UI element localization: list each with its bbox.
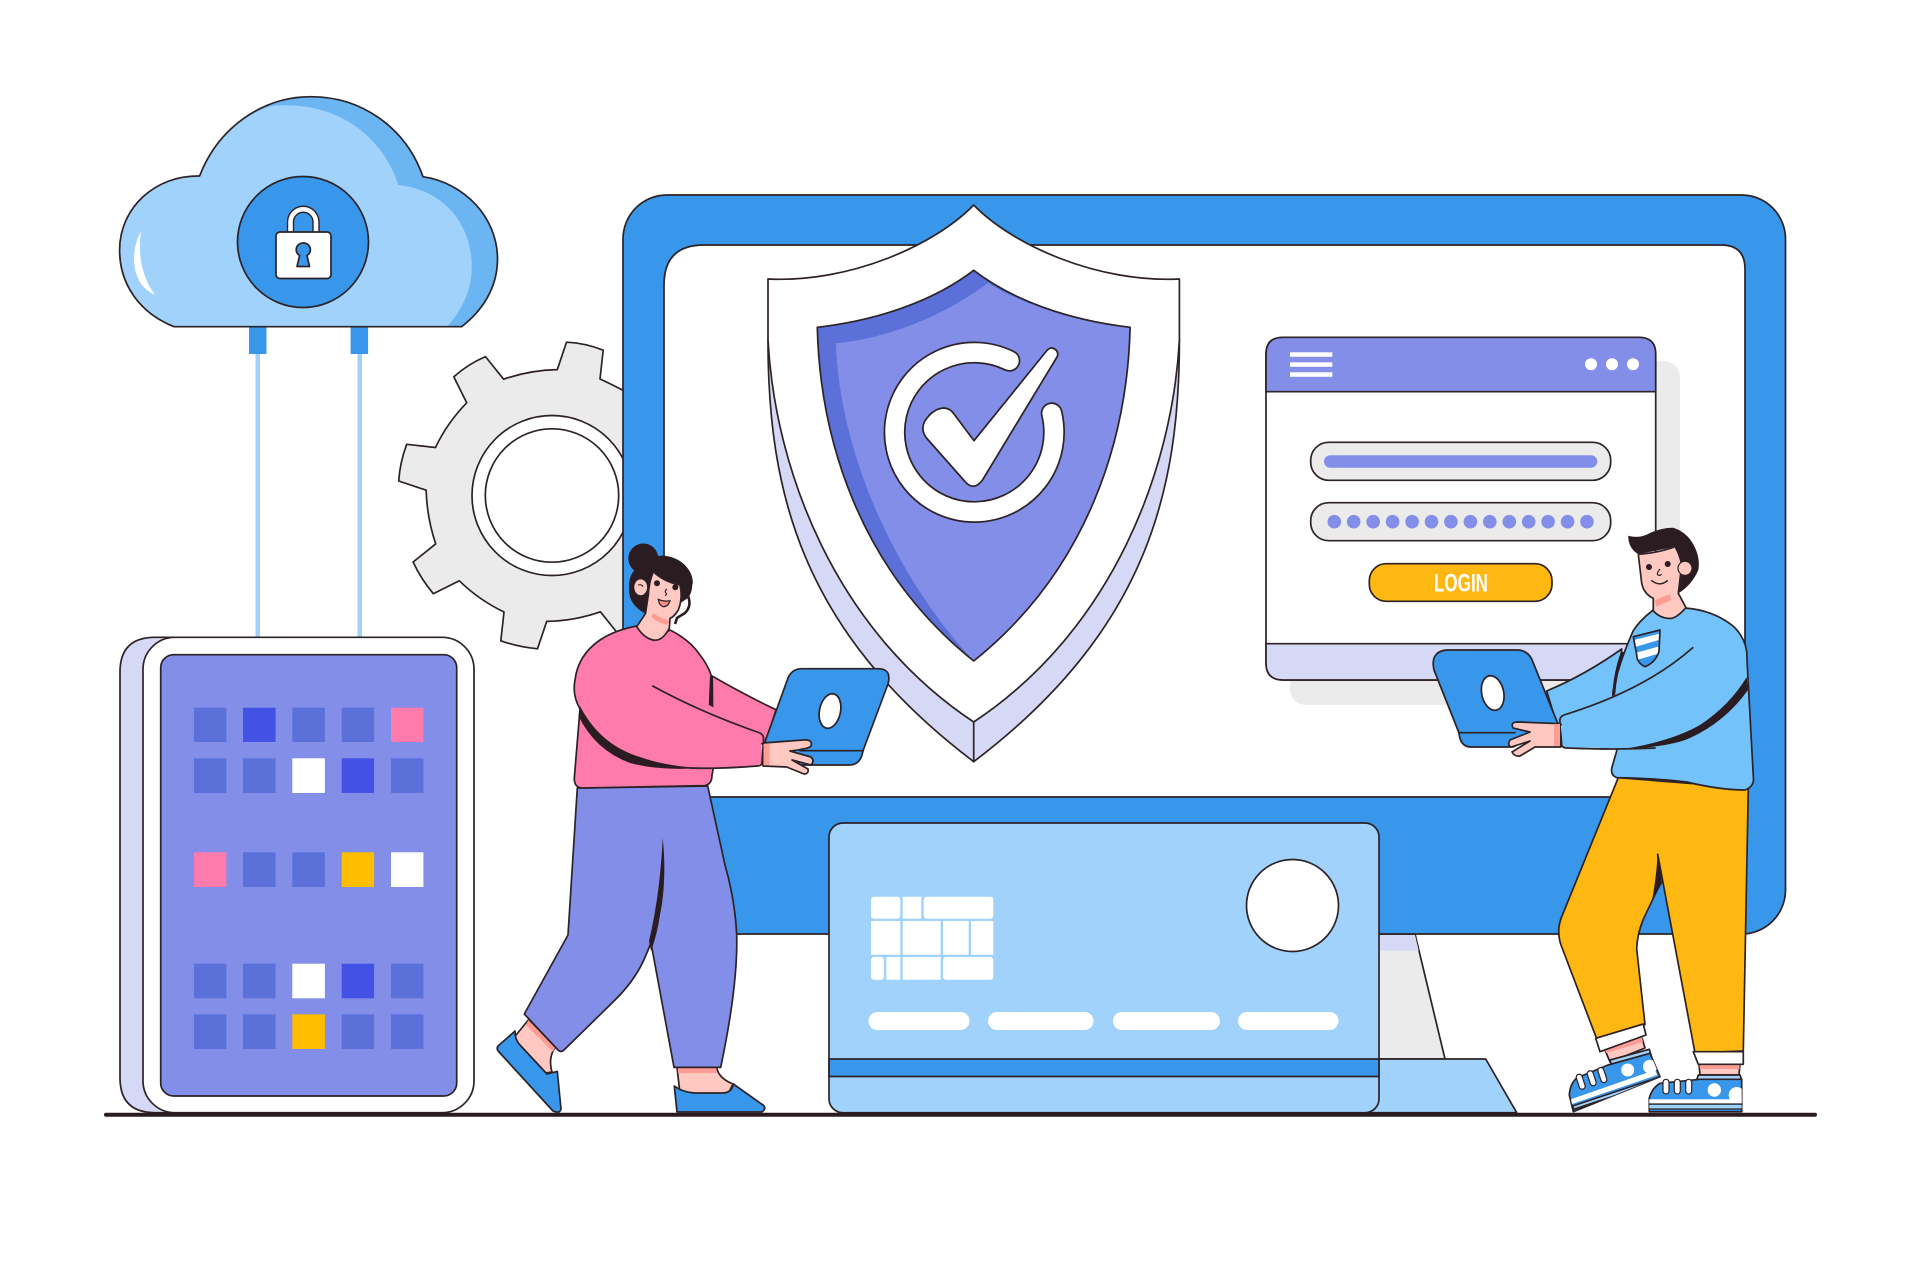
illustration: online security scene: [104, 96, 1817, 1117]
login button: [1369, 564, 1552, 601]
icon: gear behind monitor: [399, 342, 700, 649]
woman sweater: [574, 626, 764, 788]
woman hand: [763, 740, 813, 774]
server status lights: [194, 708, 423, 1049]
woman with tablet: [497, 544, 889, 1112]
cloud wires: [249, 328, 368, 637]
man hand: [1509, 722, 1561, 756]
lock badge: [238, 176, 368, 308]
card number bars: [868, 1012, 1338, 1030]
shield inner purple: [817, 270, 1130, 661]
cloud with lock: [120, 97, 497, 327]
server back: [120, 637, 200, 1113]
ground line: [104, 1113, 1817, 1117]
login window: [1266, 337, 1680, 705]
server front: [143, 637, 474, 1113]
man back arm: [1547, 649, 1622, 725]
credit card: [829, 823, 1379, 1113]
cloud body: [120, 97, 497, 327]
shield back edge: [768, 340, 1179, 762]
monitor: [623, 195, 1786, 1113]
login button: LOGIN: [1434, 570, 1488, 598]
icon: padlock: [276, 209, 331, 278]
card chip: [871, 897, 993, 980]
server screen: [161, 655, 457, 1096]
woman head: [628, 544, 693, 640]
man shirt badge: [1632, 629, 1661, 668]
monitor base: [1370, 1059, 1517, 1113]
shield with check mark: [768, 205, 1179, 762]
monitor screen: [664, 245, 1745, 797]
card stripe: [829, 1059, 1379, 1076]
monitor neck: [1370, 934, 1445, 1059]
window footer: [1266, 644, 1656, 680]
man with tablet: [1433, 528, 1754, 1112]
monitor frame: [623, 195, 1786, 934]
man left shoe: [1569, 1034, 1660, 1112]
server panel: [120, 637, 474, 1113]
man tablet: [1433, 650, 1558, 747]
woman tablet: [765, 669, 889, 765]
shield white face: [768, 205, 1179, 722]
woman feet: [497, 1020, 765, 1112]
check mark: [923, 348, 1058, 486]
window header: [1266, 337, 1656, 392]
check ring: [895, 353, 1054, 512]
password field: [1311, 503, 1611, 541]
man head: [1628, 528, 1699, 619]
man sweater: [1560, 608, 1754, 790]
window body: [1266, 337, 1656, 680]
card circle: [1246, 860, 1338, 952]
man trousers: [1559, 778, 1748, 1064]
window shadow: [1290, 361, 1680, 705]
woman back arm: [712, 676, 776, 745]
woman trousers: [524, 786, 737, 1067]
man right shoe: [1649, 1064, 1745, 1112]
username field: [1311, 442, 1611, 480]
